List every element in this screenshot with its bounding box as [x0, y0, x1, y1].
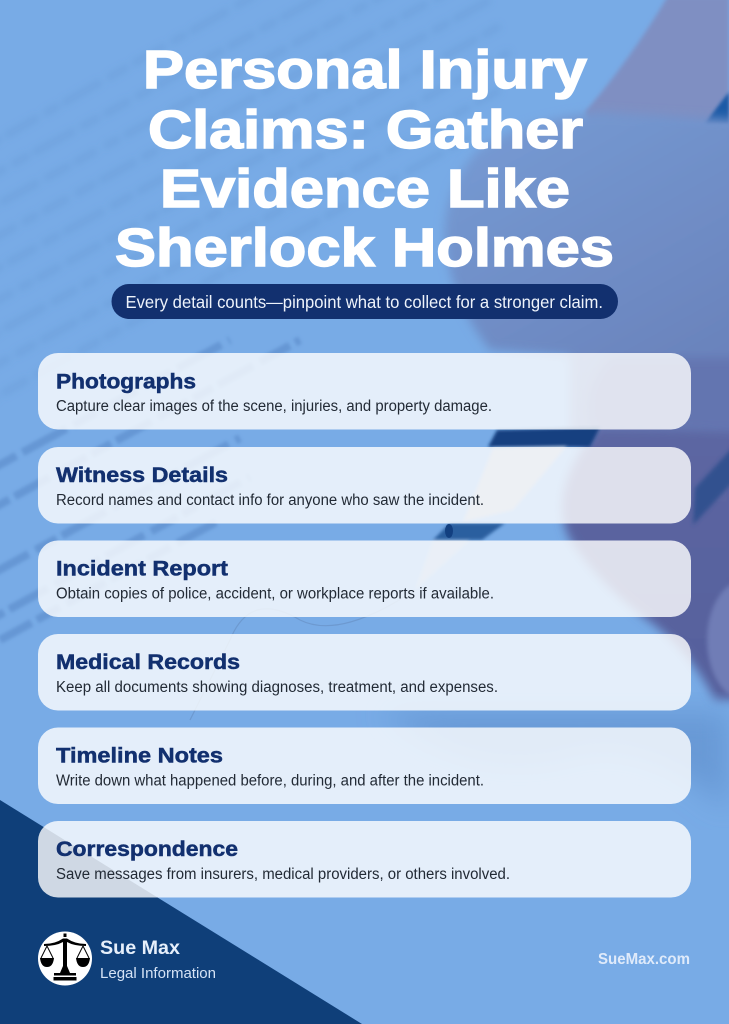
hand: upper finger: [585, 0, 729, 124]
brand name: Sue Max: [100, 938, 180, 959]
card: Correspondence: [38, 821, 691, 898]
card: Photographs: [38, 353, 691, 430]
pen: [415, 427, 600, 590]
title: Sherlock Holmes: [115, 218, 614, 278]
card: Photographs: Capture clear images of the scene, injuries, and property damage.: [56, 398, 492, 415]
card: Photographs: Photographs: [56, 370, 196, 394]
card: Witness Details: Record names and contact info for anyone who saw the incident.: [56, 492, 484, 509]
title: Personal Injury: [143, 40, 587, 100]
card: Witness Details: [38, 447, 691, 524]
brand tagline: Legal Information: [100, 965, 216, 982]
website: SueMax.com: [598, 951, 690, 968]
card: Timeline Notes: Write down what happened before, during, and after the incident.: [56, 772, 484, 790]
card: Correspondence: Correspondence: [56, 838, 238, 861]
card: Witness Details: Witness Details: [56, 464, 228, 487]
title: [115, 40, 614, 278]
card: Timeline Notes: [38, 728, 691, 804]
signature scribble: [190, 590, 415, 720]
subtitle pill: Every detail counts—pinpoint what to collect for a stronger claim.: [126, 292, 603, 312]
card: Timeline Notes: Timeline Notes: [56, 744, 223, 768]
icon: scales of justice logo: [38, 932, 92, 986]
card: Medical Records: [38, 634, 691, 710]
title: Evidence Like: [160, 159, 570, 219]
card: Incident Report: Obtain copies of police, accident, or workplace reports if available.: [56, 586, 494, 602]
card: Incident Report: Incident Report: [56, 558, 228, 580]
card: Medical Records: Keep all documents showing diagnoses, treatment, and expenses.: [56, 679, 498, 696]
card: Medical Records: Medical Records: [56, 651, 240, 674]
subtitle pill: [112, 284, 618, 319]
title: Claims: Gather: [148, 100, 583, 160]
dark corner triangle: [0, 800, 362, 1024]
hand: large blurred finger: [445, 112, 729, 440]
hand: purple lower palm: [562, 425, 729, 700]
card: Correspondence: Save messages from insurers, medical providers, or others involved.: [56, 866, 510, 883]
card: Incident Report: [38, 540, 691, 617]
